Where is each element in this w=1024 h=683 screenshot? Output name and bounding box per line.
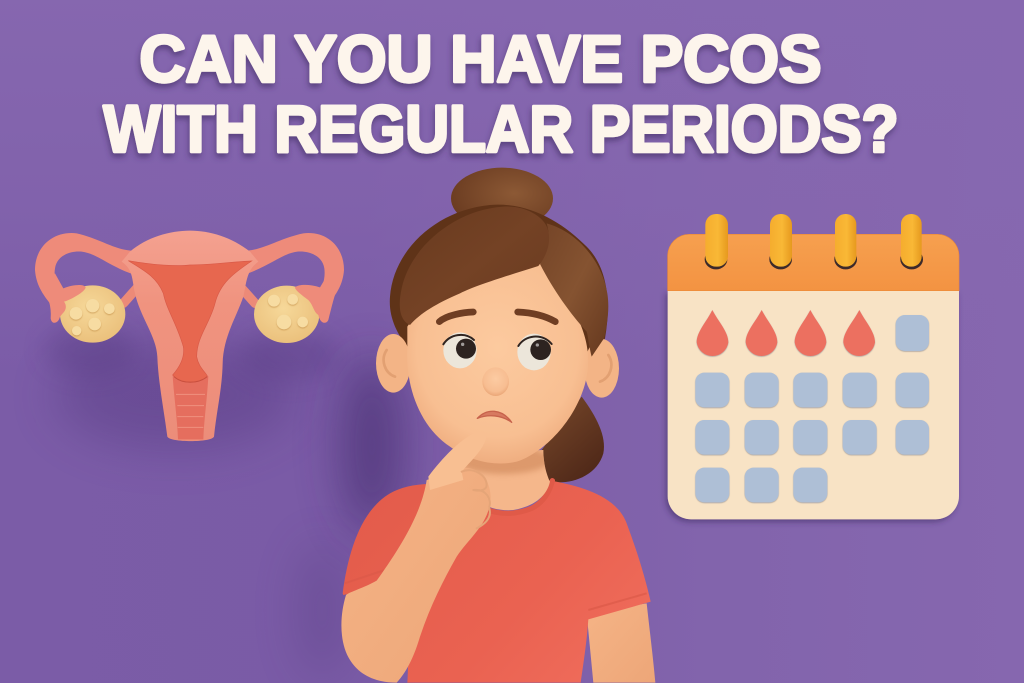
back hair (390, 205, 608, 357)
icon: calendar (668, 214, 959, 519)
ligament left (123, 288, 137, 303)
icon: uterus and ovaries (35, 231, 344, 441)
left ear (376, 334, 411, 393)
right arm (587, 603, 655, 683)
neck (463, 450, 550, 510)
calendar page (668, 291, 959, 519)
right eye (517, 334, 552, 370)
mouth (477, 411, 512, 422)
neck shadow (465, 450, 545, 476)
hair right side (540, 223, 608, 357)
title (104, 22, 898, 166)
character: thinking woman (341, 168, 655, 683)
calendar header (668, 234, 959, 291)
hair bun (451, 168, 553, 229)
raised arm and hand (341, 432, 491, 683)
fallopian tube left (35, 233, 137, 303)
right eyebrow (518, 312, 555, 322)
uterus body (122, 231, 258, 441)
background shadows (45, 325, 404, 680)
day tiles (695, 315, 929, 502)
uterine cavity (128, 261, 252, 383)
title line 2: WITH REGULAR PERIODS? (104, 92, 898, 166)
ovary right (254, 286, 319, 343)
nose (482, 367, 509, 396)
period drops (697, 310, 875, 356)
ligament right (242, 288, 255, 303)
hair fringe (400, 207, 549, 325)
ponytail (537, 397, 604, 482)
right ear (584, 339, 619, 398)
title line 1: CAN YOU HAVE PCOS (140, 22, 822, 96)
left eyebrow (439, 312, 473, 322)
fimbriae left (41, 273, 86, 323)
binding rings (705, 214, 923, 269)
fimbriae right (295, 273, 338, 323)
fallopian tube right (242, 233, 344, 303)
left eye (443, 332, 477, 368)
face (407, 263, 588, 464)
ovary left (60, 285, 125, 343)
vaginal canal (173, 376, 208, 439)
shirt (343, 481, 651, 683)
